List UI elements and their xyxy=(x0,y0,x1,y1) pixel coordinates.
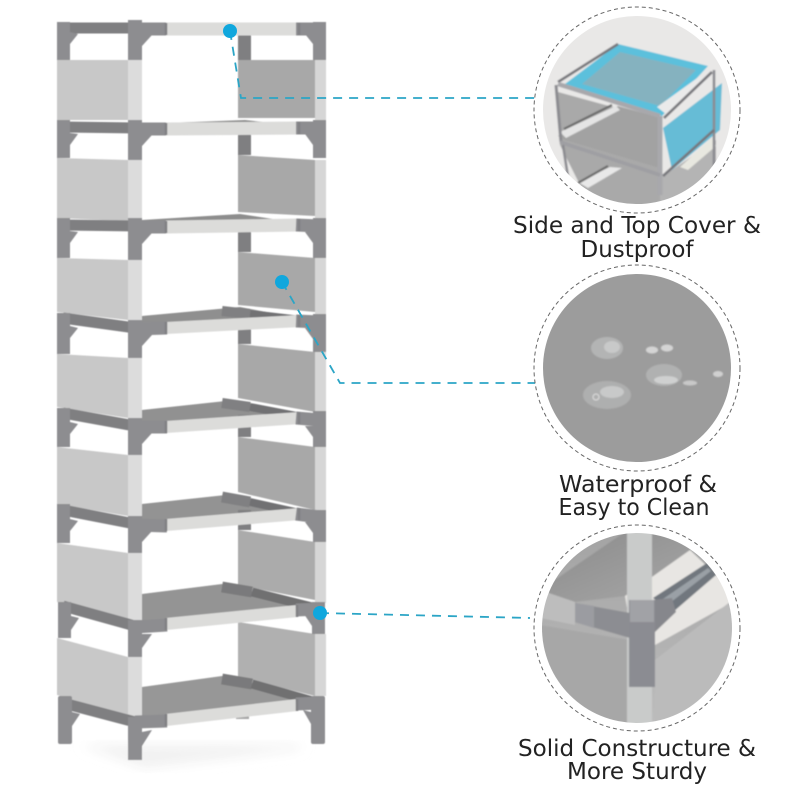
label: side and top cover: Dustproof xyxy=(580,237,694,263)
tier 2 frame xyxy=(57,120,326,160)
label: side and top cover xyxy=(513,213,761,263)
callout leader 3 xyxy=(313,606,530,620)
label: connector: More Sturdy xyxy=(567,759,707,785)
label: connector xyxy=(518,736,756,785)
side panels xyxy=(57,60,326,717)
tier 1 frame xyxy=(57,20,326,60)
callout leader 2 xyxy=(275,275,535,383)
callout leader 1 xyxy=(223,24,535,98)
tier 5 frame xyxy=(57,400,326,455)
label: waterproof: Waterproof & xyxy=(559,472,717,498)
tier 6 frame xyxy=(57,494,326,553)
tier 8 frame with legs xyxy=(58,676,325,760)
label: side and top cover: Side and Top Cover & xyxy=(513,213,761,239)
label: connector: Solid Constructure & xyxy=(518,736,756,762)
floor shadow xyxy=(80,745,305,768)
detail circle: side and top cover xyxy=(534,7,740,215)
tier 7 frame xyxy=(58,584,325,657)
shoe rack xyxy=(57,20,326,768)
water droplets xyxy=(583,337,723,409)
label: waterproof xyxy=(558,472,717,521)
tier 4 frame xyxy=(57,307,326,358)
tier 3 frame xyxy=(57,214,326,260)
detail circle: connector xyxy=(534,525,740,731)
label: waterproof: Easy to Clean xyxy=(558,495,710,521)
detail circle: waterproof xyxy=(534,265,740,471)
